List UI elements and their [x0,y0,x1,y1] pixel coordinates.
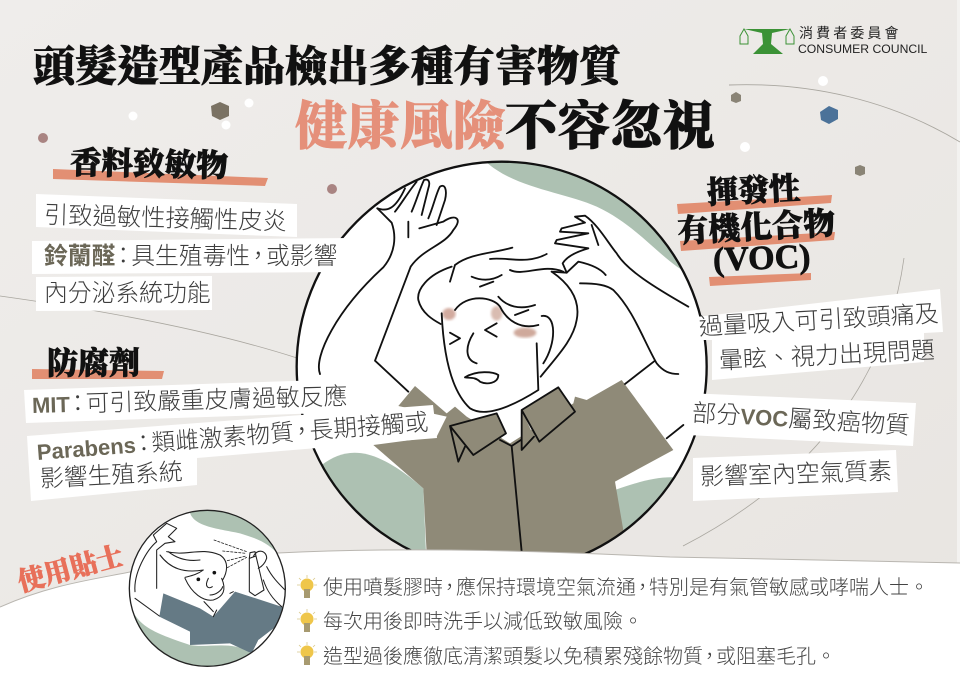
panel: preservatives [32,338,429,493]
tips heading: 使用貼士 [13,534,127,599]
icon: light bulb [297,642,317,665]
text block: 部分VOC屬致癌物質 [691,400,910,440]
heading: (VOC) [712,238,811,279]
icon: light bulb [297,575,317,598]
text block: 內分泌系統功能 [44,280,211,307]
text block: Parabens：類雌激素物質，長期接觸或 [36,409,429,465]
panel: usage tips [297,575,929,668]
text block: 影響室內空氣質素 [700,458,892,491]
heading: 防腐劑 [47,338,140,383]
title line 2: 健康風險不容忽視 [295,85,715,160]
text block: 暈眩、視力出現問題 [718,337,935,375]
heading: 揮發性 [706,163,801,212]
bottom white band [0,550,960,679]
white text backings [24,194,943,501]
heading: 香料致敏物 [70,138,228,187]
panel: fragrance allergens [44,138,337,307]
main illustration: stressed person in circle [297,150,713,572]
logo: Consumer Council: CONSUMER COUNCIL [798,42,927,56]
text block: 引致過敏性接觸性皮炎 [44,202,287,236]
logo text: 消費者委員會 [799,25,902,41]
logo: Consumer Council [740,25,927,56]
logo mark [740,28,794,54]
icon: light bulb [297,609,317,632]
text block: MIT：可引致嚴重皮膚過敏反應 [32,383,348,418]
heading: 有機化合物 [676,199,836,252]
panel: VOC [676,163,939,491]
tip text: 每次用後即時洗手以減低致敏風險。 [323,611,643,633]
tip text: 使用噴髮膠時，應保持環境空氣流通，特別是有氣管敏感或哮喘人士。 [323,577,929,599]
text block: 鈴蘭醛：具生殖毒性，或影響 [44,243,337,270]
text block: 過量吸入可引致頭痛及 [698,300,939,340]
title line 1: 頭髮造型產品檢出多種有害物質 [33,34,621,94]
tip text: 造型過後應徹底清潔頭髮以免積累殘餘物質，或阻塞毛孔。 [323,646,836,668]
decorative dots [38,76,865,194]
heading stripes [32,169,835,379]
text block: 影響生殖系統 [39,459,183,493]
small illustration: person using hairspray [128,510,286,667]
